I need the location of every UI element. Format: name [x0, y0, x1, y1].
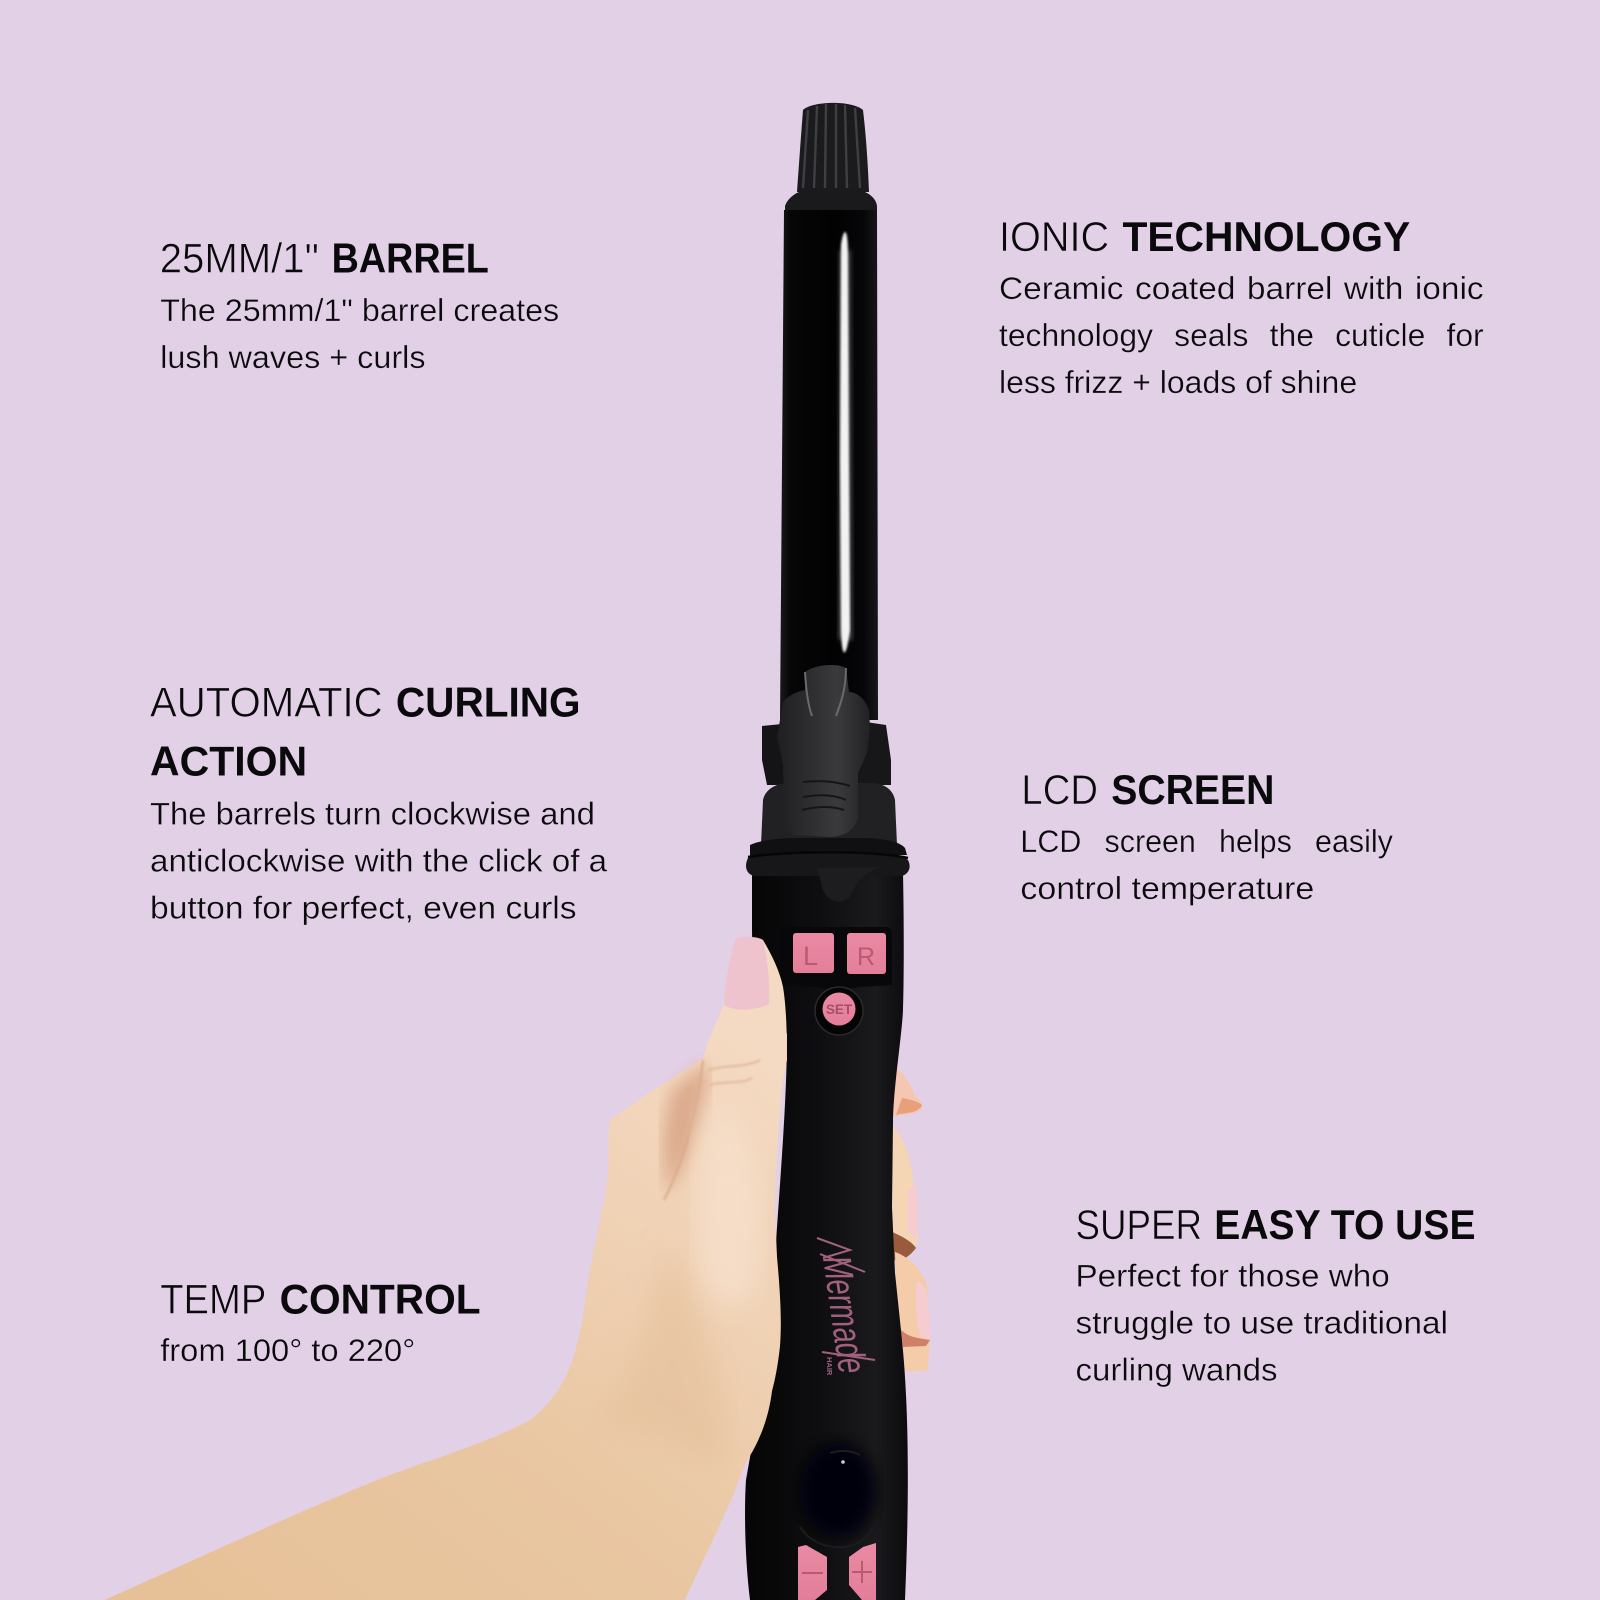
body: curling description — [150, 795, 608, 925]
body: ease of use description: struggle to use traditional — [1076, 1305, 1448, 1341]
text block: lcd screen — [1020, 766, 1393, 906]
body: curling description: The barrels turn clockwise and — [150, 795, 595, 831]
heading: automatic curling action — [150, 678, 581, 785]
heading: super easy to use: SUPER — [1076, 1201, 1202, 1248]
heading: automatic curling action: AUTOMATIC — [150, 678, 383, 725]
text block: temp control — [160, 1275, 481, 1368]
logo — [814, 1238, 875, 1376]
hand and arm — [105, 937, 787, 1600]
clip body — [761, 665, 897, 845]
palm crease — [664, 1060, 703, 1200]
heading: super easy to use — [1076, 1201, 1476, 1248]
body: temperature range: from 100° to 220° — [160, 1332, 415, 1368]
heading: super easy to use: EASY TO USE — [1214, 1201, 1476, 1248]
body: ease of use description: curling wands — [1076, 1352, 1278, 1388]
logo: Mermade — [814, 1253, 874, 1376]
heading: automatic curling action: CURLING — [396, 678, 581, 725]
body: ionic description — [999, 270, 1484, 400]
collar rings — [746, 838, 910, 876]
barrel glow — [838, 250, 853, 640]
body: curling description: anticlockwise with the click of a — [150, 842, 608, 878]
button: L: L — [803, 941, 818, 971]
heading: lcd screen: LCD — [1021, 766, 1098, 813]
heading: 25mm barrel: BARREL — [332, 234, 489, 281]
button: R: R — [857, 943, 875, 971]
wand tip — [797, 103, 869, 192]
body: ionic description: Ceramic coated barrel with ionic — [999, 270, 1484, 306]
body: ionic description: technology seals the cuticle for — [999, 317, 1484, 353]
thumb light — [696, 1100, 761, 1308]
button: plus — [849, 1543, 876, 1600]
logo sub-mark: HAIR — [825, 1357, 834, 1376]
handle — [745, 873, 908, 1600]
heading: ionic technology: TECHNOLOGY — [1122, 213, 1410, 260]
text block: automatic curling action — [150, 678, 608, 925]
barrel collar — [785, 190, 877, 214]
body: ease of use description: Perfect for those who — [1076, 1258, 1390, 1294]
barrel — [780, 210, 878, 720]
body: barrel description: lush waves + curls — [160, 339, 426, 375]
heading: temp control: TEMP — [160, 1275, 266, 1322]
heading: automatic curling action: ACTION — [150, 738, 307, 785]
heading: temp control: CONTROL — [280, 1275, 481, 1322]
fingers behind handle — [890, 1066, 930, 1372]
screen area — [800, 1442, 876, 1547]
body: lcd description: LCD screen helps easily — [1020, 823, 1393, 859]
curling wand — [745, 103, 910, 1600]
button: minus — [798, 1545, 827, 1600]
body: lcd description — [1020, 823, 1393, 906]
thumb crease — [708, 1060, 760, 1085]
heading: 25mm barrel: 25MM/1" — [160, 234, 319, 281]
button: set — [815, 987, 863, 1035]
barrel highlight — [840, 232, 850, 652]
body: ease of use description — [1076, 1258, 1448, 1388]
illustration: product photo group — [105, 103, 930, 1600]
body: barrel description — [160, 292, 559, 375]
text block: ionic technology — [999, 213, 1484, 400]
button: R — [847, 933, 886, 974]
button: L — [793, 933, 834, 973]
heading: lcd screen — [1021, 766, 1274, 813]
handle neck notch — [817, 867, 884, 902]
text block: barrel — [160, 234, 559, 375]
palm shadow — [663, 1062, 708, 1195]
heading: ionic technology — [999, 213, 1410, 260]
arm and palm — [105, 940, 787, 1600]
body: lcd description: control temperature — [1020, 870, 1314, 906]
button: set: SET — [826, 1002, 853, 1017]
body: ionic description: less frizz + loads of shine — [999, 364, 1357, 400]
button panel — [780, 927, 892, 990]
heading: temp control — [160, 1275, 481, 1322]
text block: super easy to use — [1076, 1201, 1476, 1388]
thumb nail — [724, 937, 769, 1010]
body: curling description: button for perfect, even curls — [150, 889, 577, 925]
wrist shadow — [590, 1240, 725, 1470]
heading: ionic technology: IONIC — [999, 213, 1109, 260]
heading: 25mm barrel — [160, 234, 489, 281]
body: barrel description: The 25mm/1" barrel creates — [160, 292, 559, 328]
heading: lcd screen: SCREEN — [1111, 766, 1274, 813]
